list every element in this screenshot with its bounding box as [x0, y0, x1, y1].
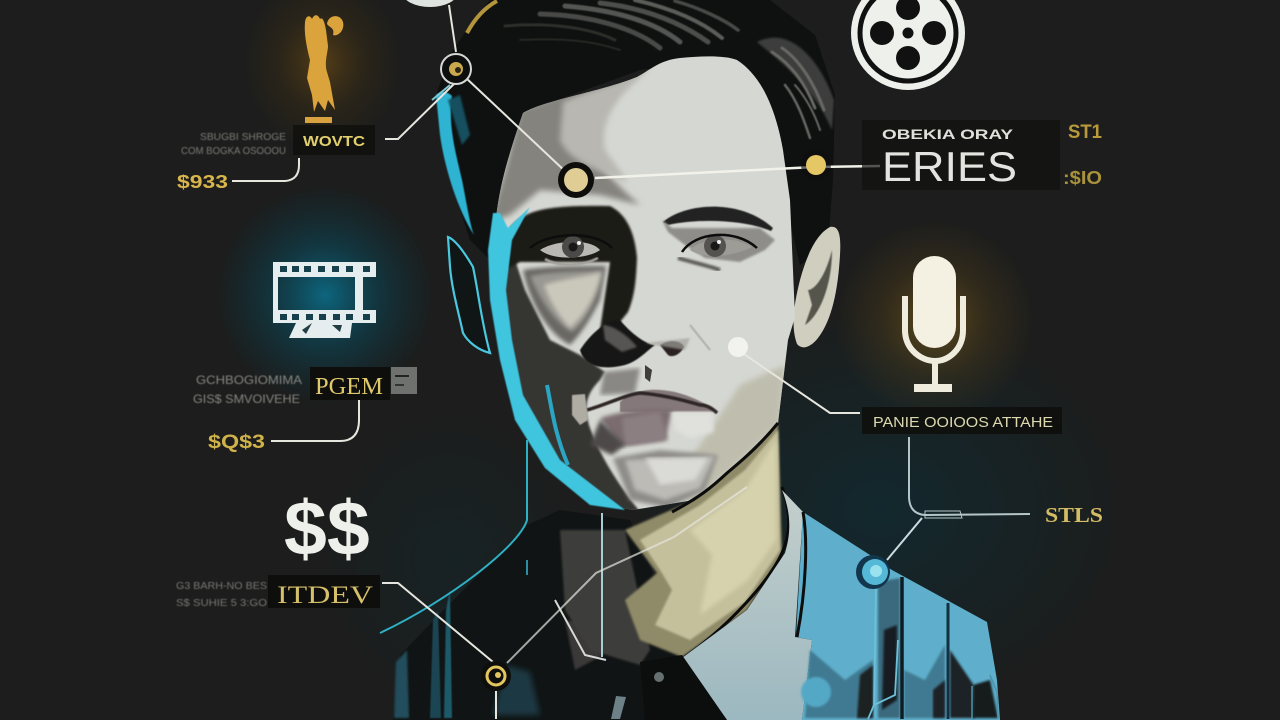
icon glow: trophy	[242, 0, 402, 152]
label: small gray text	[181, 132, 286, 157]
hair	[436, 0, 835, 265]
top partial node	[402, 0, 458, 7]
icon glow: teal	[215, 185, 435, 405]
node: temple	[801, 150, 831, 180]
face	[485, 50, 805, 520]
neck	[625, 423, 789, 658]
panel: film strip	[193, 185, 435, 453]
value: ST1: ST1	[1068, 122, 1102, 143]
label: small gray text: GCHBOGIOMIMA	[196, 373, 302, 387]
node: forehead	[558, 162, 594, 198]
gold hair accent	[467, 1, 497, 33]
label: PGEM box: PGEM	[315, 374, 383, 400]
value: film: $Q$3	[208, 432, 265, 453]
label: mic box: PANIE OOIOOS ATTAHE	[873, 414, 1053, 431]
node: cheek	[728, 337, 748, 357]
label: ITDEV box	[268, 575, 380, 609]
value: movie: $933	[177, 172, 228, 192]
label: ERIES box: ERIES	[882, 143, 1017, 190]
label: WOVTC box: WOVTC	[303, 133, 365, 150]
shirt collar	[682, 490, 812, 720]
label: ITDEV box: ITDEV	[277, 582, 373, 609]
blue jacket	[796, 512, 1000, 720]
label: mic box	[862, 407, 1062, 434]
label: PGEM box	[310, 367, 390, 400]
icon: dollar signs: $$	[284, 486, 370, 572]
right eye	[678, 235, 757, 270]
forehead shading	[490, 68, 650, 222]
label: small gray text: COM BOGKA OSOOOU	[181, 146, 286, 157]
eye socket shadow	[505, 206, 637, 330]
lower-right tones	[686, 365, 785, 500]
icon glow: warm	[835, 220, 1035, 420]
lips	[572, 390, 717, 447]
left dark shadow	[505, 262, 640, 510]
panel: money	[176, 486, 380, 609]
cyan hair highlight	[432, 85, 474, 235]
above-lip shade	[600, 368, 640, 395]
label: small gray text: SBUGBI SHROGE	[200, 132, 286, 143]
label: small gray text	[176, 581, 267, 609]
value: SIO: :$IO	[1063, 168, 1102, 188]
cyan neck and shoulder lines	[380, 440, 606, 660]
icon: film reel	[851, 0, 965, 90]
label: small gray text: G3 BARH-NO BES	[176, 581, 267, 592]
right ear	[794, 227, 840, 347]
nose	[580, 320, 710, 382]
cyan face rim	[488, 207, 625, 510]
panel: movie award	[177, 0, 402, 192]
label: small gray text	[193, 373, 302, 406]
label: small gray text: S$ SUHIE 5 3:GO	[176, 598, 267, 609]
label: WOVTC box	[293, 125, 375, 155]
node: hair	[441, 54, 471, 84]
collar and black tie	[611, 655, 727, 720]
icon: gold trophy	[305, 15, 343, 123]
panel: film reel series	[851, 0, 1102, 190]
connector lines	[232, 5, 1030, 719]
jaw line	[672, 423, 778, 512]
lower-left under-lip	[590, 420, 625, 455]
small gray box	[391, 367, 417, 394]
panel: microphone	[835, 220, 1103, 527]
label: ERIES box	[862, 120, 1060, 190]
cheek light patch	[523, 266, 606, 345]
right brow	[663, 207, 773, 231]
chin tones	[613, 450, 718, 508]
label: small gray text: GIS$ SMVOIVEHE	[193, 392, 300, 406]
infographic canvas	[176, 0, 1102, 720]
node: shoulder	[856, 555, 890, 589]
node: collar	[481, 661, 511, 691]
body: dark jacket and strips	[393, 510, 730, 720]
left ear outline	[448, 237, 490, 353]
value: STLS: STLS	[1045, 503, 1103, 527]
label: ERIES box: OBEKIA ORAY	[882, 126, 1014, 142]
icon: film strip monitor	[273, 262, 376, 338]
left eye	[530, 235, 612, 265]
icon: microphone	[905, 256, 963, 392]
